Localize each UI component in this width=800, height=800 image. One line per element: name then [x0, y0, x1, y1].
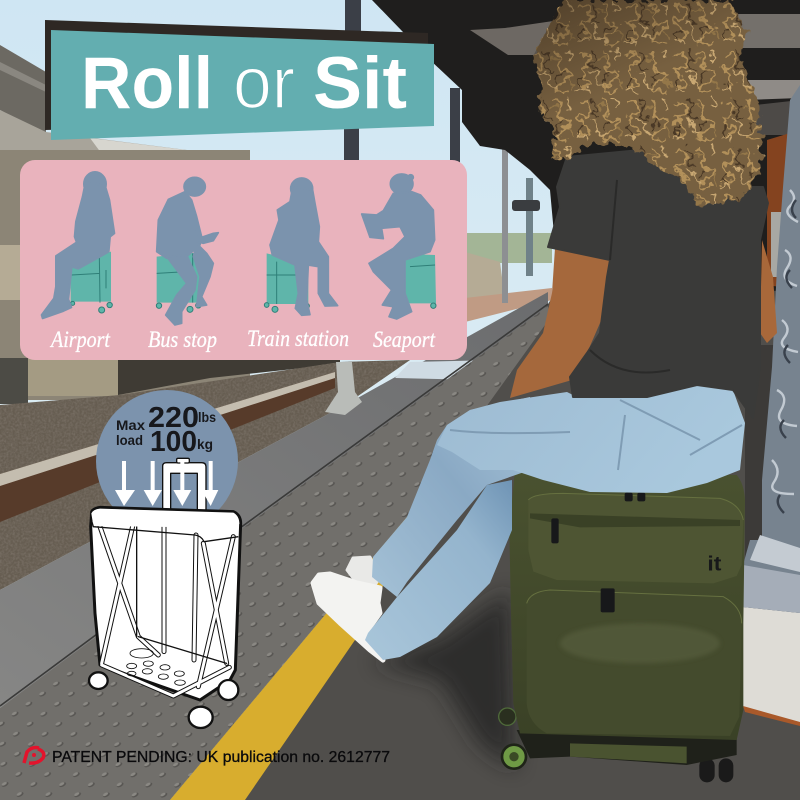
- stone pedestal: [743, 607, 800, 723]
- wheels: [89, 672, 238, 728]
- handle: [163, 458, 206, 512]
- label: Airport: Airport: [49, 327, 111, 352]
- yellow line: [170, 515, 420, 800]
- ornamental lamp post: [743, 85, 800, 613]
- label: Seaport: Seaport: [373, 327, 436, 352]
- ballast: [0, 355, 420, 595]
- text: Max load: Max: [116, 418, 146, 433]
- label: Train station: Train station: [247, 326, 349, 351]
- back sneaker: [347, 557, 380, 590]
- banner dark backing: [45, 20, 428, 130]
- arm: [510, 248, 610, 398]
- base: [517, 730, 737, 765]
- text: Max load: [116, 418, 146, 448]
- text: 220 lbs: 220: [148, 402, 199, 434]
- label: Bus stop: Bus stop: [148, 327, 217, 352]
- front sneaker: [313, 574, 383, 660]
- canopy roof: [372, 0, 800, 300]
- curly hair: [532, 0, 762, 207]
- internal struts: [100, 523, 233, 696]
- silhouettes: [42, 172, 436, 325]
- wheels: [499, 708, 733, 782]
- figure: train station: [264, 178, 338, 315]
- seated woman: [313, 0, 777, 660]
- figure: seaport: [362, 174, 436, 319]
- platform slab: [0, 292, 548, 708]
- title text: Roll: [81, 43, 213, 124]
- text: 220 lbs: lbs: [198, 410, 216, 425]
- station posts: [344, 0, 540, 303]
- tarmac: [170, 290, 800, 800]
- green it suitcase: [499, 469, 745, 782]
- text: 100 kg: kg: [197, 437, 213, 452]
- title word: or: or: [233, 43, 295, 124]
- figure: airport: [42, 172, 114, 318]
- it logo: it: [707, 552, 721, 575]
- cutaway suitcase frame diagram: [89, 458, 241, 728]
- t-shirt: [548, 150, 768, 418]
- suitcase shadow: [372, 590, 515, 770]
- patent logo: [24, 748, 44, 763]
- train: [0, 45, 340, 404]
- tactile paving: [0, 306, 550, 800]
- hips and thigh: [437, 385, 745, 493]
- lower pocket: [527, 590, 742, 736]
- zip pulls: [551, 493, 645, 612]
- figure: bus stop: [156, 177, 218, 325]
- title banner: [45, 20, 434, 140]
- banner teal face: [51, 30, 434, 140]
- far jeans shin: [365, 480, 512, 660]
- text: Max load: load: [116, 433, 143, 448]
- text: 100 kg: 100: [150, 426, 197, 458]
- upper pocket: [528, 493, 743, 583]
- near jeans shin: [372, 397, 530, 597]
- body: [509, 469, 745, 740]
- top rim: [91, 509, 239, 542]
- panel: four use locations: [20, 160, 467, 360]
- title word: Sit: Sit: [313, 43, 407, 124]
- patent pending text: PATENT PENDING: UK publication no. 2612777: [52, 749, 390, 766]
- max load badge: [96, 390, 238, 532]
- far platform and greenery: [465, 233, 552, 322]
- load arrows: [115, 461, 218, 506]
- base ovals: [127, 649, 185, 685]
- shell: [91, 507, 241, 700]
